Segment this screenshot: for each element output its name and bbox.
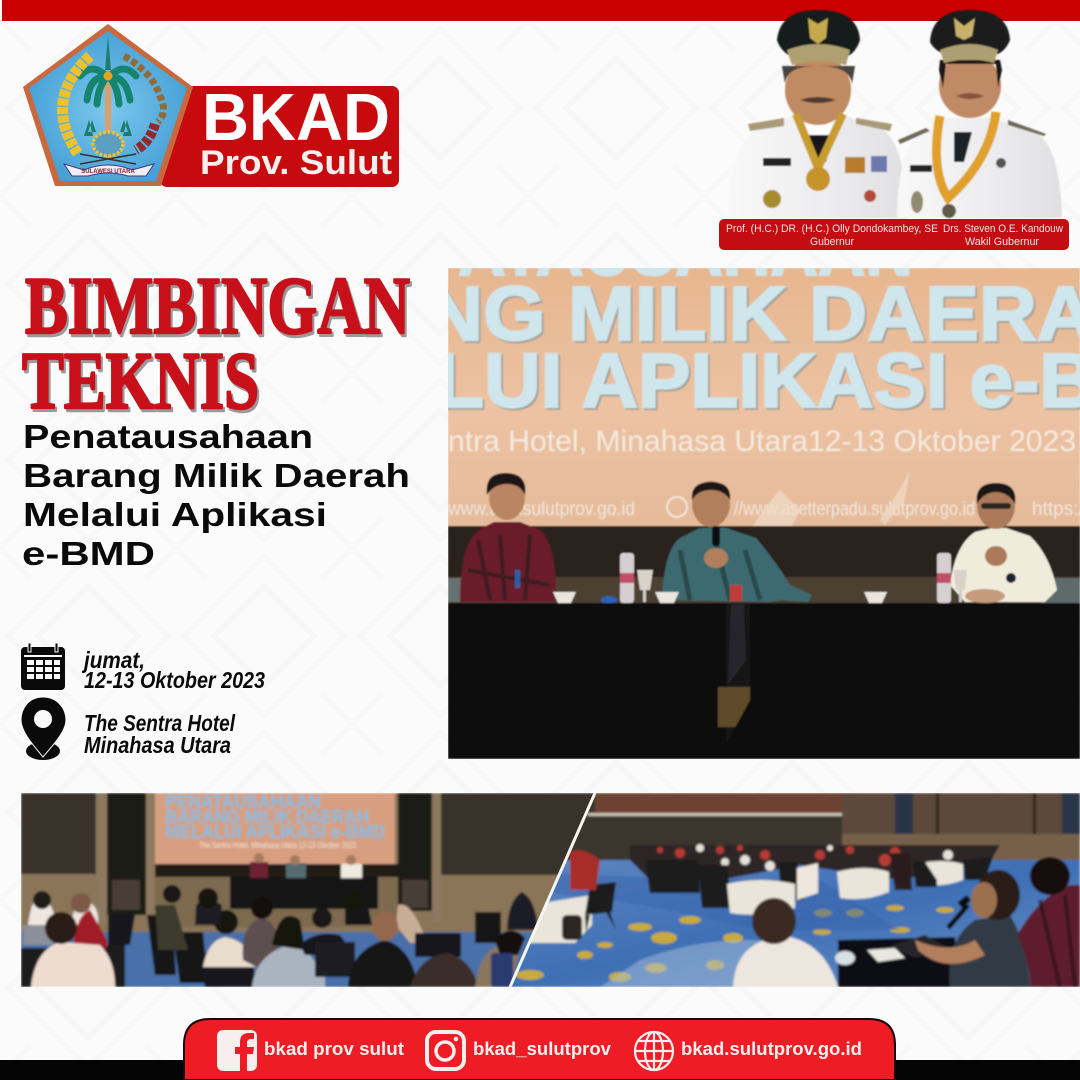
title: Bimbingan Teknis bbox=[22, 260, 412, 429]
projection screen: ATAUSAHAAN bbox=[458, 206, 913, 292]
speakers' table bbox=[835, 935, 960, 987]
subtitle text block: Melalui Aplikasi bbox=[23, 496, 327, 533]
speaker: centre, teal batik with microphone bbox=[662, 481, 812, 602]
date text bbox=[81, 647, 265, 693]
caption plate: names and titles bbox=[719, 219, 1069, 250]
crowd at the far tables bbox=[630, 844, 1000, 908]
governor and vice-governor portraits bbox=[719, 10, 1069, 250]
projection screen: //www.asetterpadu.sulutprov.go.id bbox=[734, 499, 975, 520]
round white tables bbox=[525, 861, 963, 943]
icon: location pin bbox=[21, 697, 66, 760]
patterned blue carpet bbox=[510, 860, 1080, 987]
photo: wide room with round tables bbox=[510, 793, 1080, 987]
projection screen: NG MILIK DAERA bbox=[427, 273, 1080, 359]
social media plate bbox=[184, 1019, 895, 1080]
portrait: governor bbox=[727, 10, 908, 218]
footer band bbox=[0, 1019, 1080, 1080]
speaker: left, batik shirt bbox=[460, 473, 556, 602]
subtitle text block bbox=[22, 418, 410, 572]
person in maroon batik shirt bbox=[1017, 857, 1080, 987]
room walls bbox=[21, 793, 594, 934]
projection screen: www.asetsulutprov.go.id bbox=[447, 499, 635, 520]
projection screen with title: The Sentra Hotel, Minahasa Utara 12-13 Oktober 2023 bbox=[199, 841, 356, 850]
title: Bimbingan Teknis: TEKNIS bbox=[22, 335, 259, 426]
caption plate: names and titles: Prof. (H.C.) DR. (H.C.) Olly Dondokambey, SE bbox=[726, 223, 938, 235]
wordmark plate: BKAD bbox=[202, 80, 390, 155]
title: Bimbingan Teknis: BIMBINGAN bbox=[25, 260, 410, 351]
facebook icon and handle bbox=[217, 1030, 404, 1071]
projection screen with title: PENATAUSAHAAN bbox=[165, 792, 321, 812]
white diagonal divider between photos bbox=[510, 793, 595, 987]
seated audience bbox=[21, 885, 538, 987]
projection screen: LUI APLIKASI e-B bbox=[436, 338, 1080, 424]
logo: BKAD Prov. Sulut bbox=[23, 24, 399, 187]
table with black cloth bbox=[448, 603, 1080, 759]
venue text: Minahasa Utara bbox=[84, 732, 231, 758]
projection screen: NG MILIK DAERA bbox=[425, 271, 1080, 357]
facebook icon and handle: bkad prov sulut bbox=[264, 1039, 404, 1059]
room back wall bbox=[566, 793, 1080, 862]
subtitle text block: Barang Milik Daerah bbox=[23, 457, 410, 494]
projection screen with title: BARANG MILIK DAERAH bbox=[165, 807, 369, 827]
wordmark plate bbox=[160, 80, 399, 187]
chairs by the tables bbox=[562, 850, 993, 940]
icon: calendar bbox=[21, 643, 65, 690]
date text: jumat, bbox=[81, 647, 145, 673]
globe icon and website bbox=[635, 1032, 862, 1070]
top red bar bbox=[2, 0, 1080, 21]
instagram icon and handle bbox=[427, 1032, 611, 1069]
subtitle text block: e-BMD bbox=[22, 535, 155, 572]
projection screen bbox=[448, 268, 1080, 528]
stage table and speakers bbox=[230, 853, 378, 909]
speaker with microphone, batik shirt bbox=[915, 870, 1030, 987]
tabletop items: bottles, glasses, bowls bbox=[553, 553, 967, 604]
photo: speakers panel on stage bbox=[448, 268, 1080, 759]
photo: seminar room from the back bbox=[21, 792, 595, 987]
instagram icon and handle: bkad_sulutprov bbox=[473, 1039, 611, 1059]
wordmark plate: Prov. Sulut bbox=[200, 144, 392, 182]
caption plate: names and titles: Wakil Gubernur bbox=[965, 236, 1039, 248]
title: Bimbingan Teknis: BIMBINGAN bbox=[27, 263, 412, 354]
title: Bimbingan Teknis: TEKNIS bbox=[24, 338, 261, 429]
speaker: right, white polo bbox=[950, 483, 1057, 603]
venue text: The Sentra Hotel bbox=[84, 710, 235, 736]
carpet floor bbox=[21, 932, 595, 987]
emblem: pentagon crest: SULAWESI UTARA bbox=[81, 169, 135, 175]
caption plate: names and titles: Drs. Steven O.E. Kandouw bbox=[943, 223, 1063, 235]
person seated, white shirt, seen from behind bbox=[733, 898, 838, 987]
projection screen: LUI APLIKASI e-B bbox=[438, 340, 1080, 426]
caption plate: names and titles: Gubernur bbox=[810, 236, 854, 248]
projection screen: ntra Hotel, Minahasa Utara12-13 Oktober 2023 bbox=[448, 425, 1076, 458]
projection screen with title bbox=[155, 792, 395, 864]
date text: 12-13 Oktober 2023 bbox=[84, 667, 265, 693]
globe icon and website: bkad.sulutprov.go.id bbox=[681, 1039, 862, 1059]
projection screen with title: MELALUI APLIKASI e-BMD bbox=[165, 822, 385, 842]
portrait: vice-governor bbox=[897, 10, 1062, 218]
subtitle text block: Penatausahaan bbox=[23, 418, 313, 455]
stage wall bbox=[448, 526, 1080, 578]
emblem: pentagon crest bbox=[23, 24, 193, 186]
venue text bbox=[84, 710, 235, 758]
